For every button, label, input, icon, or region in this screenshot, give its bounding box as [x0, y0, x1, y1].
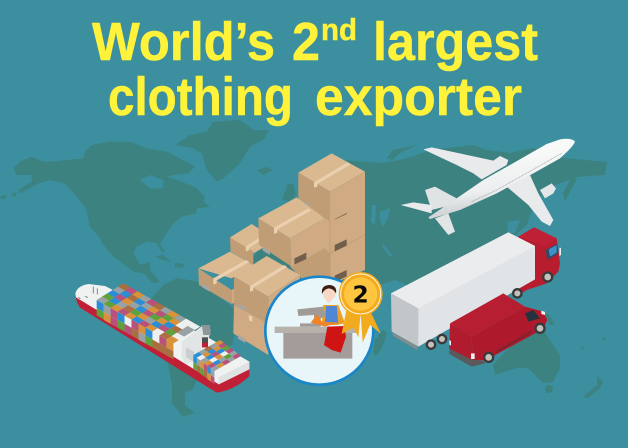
yellow sea: [507, 220, 520, 233]
van side strip: [497, 332, 532, 352]
madagascar: [373, 330, 387, 356]
map seas: [371, 205, 520, 257]
black sea: [380, 208, 390, 227]
near engine: [540, 183, 556, 198]
ribbons: [342, 307, 381, 343]
fabric in hands: [311, 314, 338, 327]
title line one: World’s: [92, 12, 275, 72]
rear container fronts: [193, 355, 214, 384]
north america: [13, 142, 210, 283]
eurasia and africa: [245, 145, 607, 350]
seamstress badge: [265, 277, 373, 385]
rear container tops: [193, 340, 241, 371]
main container fronts: [97, 300, 173, 359]
trailer: [391, 232, 535, 350]
title line one: nd: [321, 12, 357, 47]
world map: [0, 120, 607, 417]
fuselage: [428, 139, 575, 219]
kamchatka: [563, 178, 577, 202]
front stack: [233, 256, 300, 355]
alaska islands: [0, 191, 17, 199]
van side: [472, 307, 547, 361]
title line two: exporter: [315, 67, 522, 127]
baltic sea: [371, 205, 376, 225]
caribbean islands: [155, 255, 184, 268]
truck wheels: [426, 271, 553, 350]
title line two: clothing: [108, 67, 293, 127]
top box: [298, 153, 365, 222]
title line two: [108, 67, 522, 127]
cab: [517, 227, 561, 297]
iceland: [257, 167, 273, 175]
middle lower box: [290, 248, 330, 283]
van bumper: [449, 347, 485, 367]
truck: [391, 227, 561, 350]
medal number: 2: [353, 281, 369, 309]
near wing: [507, 175, 553, 226]
main container tops: [97, 283, 200, 343]
container ship: [75, 283, 249, 393]
tail fin: [425, 187, 457, 210]
stern rail: [218, 362, 249, 385]
new zealand: [583, 375, 603, 398]
red van: [449, 293, 547, 367]
novaya zemlya: [387, 145, 417, 160]
title line one: 2: [292, 12, 320, 72]
worker: [322, 285, 345, 325]
greenland: [175, 120, 269, 182]
desk: [275, 327, 358, 359]
south america: [150, 278, 238, 417]
red garment: [324, 326, 346, 353]
van rear: [449, 323, 473, 360]
middle box: [258, 197, 325, 267]
title line one: [92, 12, 538, 72]
left tailplane: [401, 202, 432, 213]
left front box: [198, 252, 253, 304]
right tailplane: [435, 213, 455, 235]
cardboard boxes: [198, 153, 365, 355]
medal ring: [341, 274, 381, 314]
tasmania: [545, 385, 553, 393]
bow details: [78, 287, 97, 299]
medal centre: [344, 277, 377, 311]
rear left box: [230, 224, 277, 265]
britain: [282, 183, 296, 201]
van lights: [449, 311, 545, 359]
airplane: [401, 139, 575, 235]
window line: [472, 153, 562, 202]
deck: [75, 284, 249, 384]
van windshield: [525, 310, 540, 322]
badge circle: [265, 277, 373, 385]
van roof: [450, 293, 525, 337]
title line one: largest: [373, 12, 538, 72]
red sea: [382, 243, 392, 257]
australia: [493, 320, 560, 383]
bridge superstructure: [182, 325, 211, 364]
pacific islets: [580, 336, 606, 350]
indonesia islands: [545, 313, 555, 325]
hull: [75, 294, 249, 393]
title: [92, 12, 538, 127]
medal disc: [339, 272, 383, 316]
sewing machine: [297, 307, 326, 327]
far wing: [423, 147, 508, 179]
right column lower boxes: [325, 203, 365, 285]
second place medal: [339, 272, 383, 343]
van wheels: [483, 323, 546, 363]
